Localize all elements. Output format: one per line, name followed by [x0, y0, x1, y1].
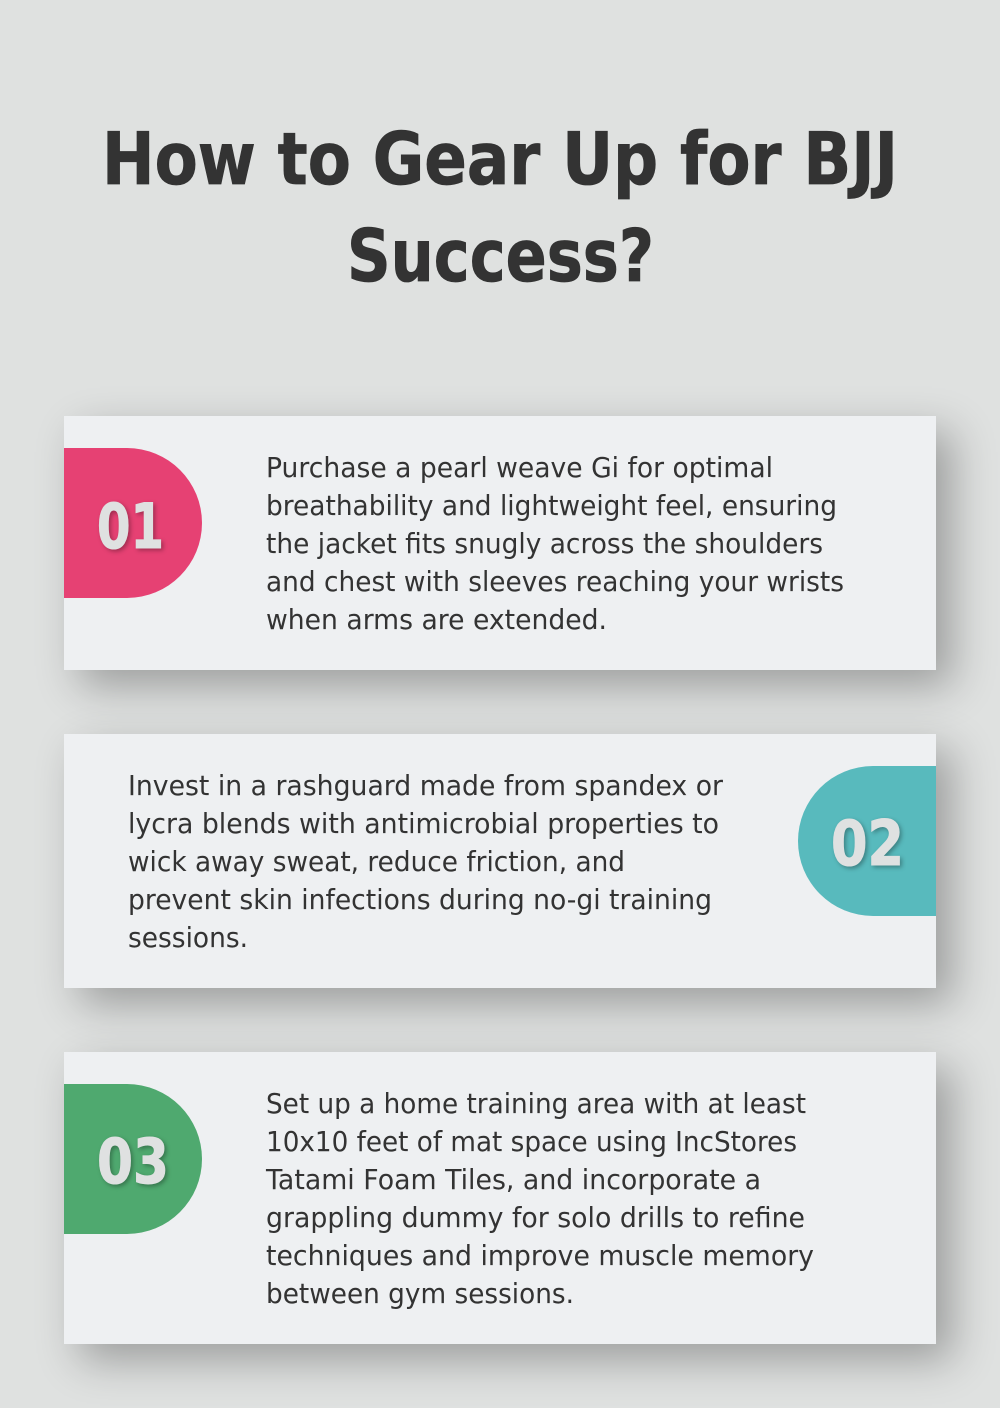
badge: 02: [798, 766, 936, 916]
title: Success?: [347, 214, 654, 298]
text: step 03 description: techniques and improve muscle memory: [266, 1240, 814, 1272]
panel: step 02: [64, 734, 936, 988]
badge: 01: [64, 448, 202, 598]
text: step 01 description: [266, 452, 844, 636]
title: How to Gear Up for BJJ: [102, 117, 898, 201]
text: step 02 description: prevent skin infections during no-gi training: [128, 884, 712, 916]
text: step 02 description: sessions.: [128, 922, 248, 954]
text: step 01 description: breathability and lightweight feel, ensuring: [266, 490, 837, 522]
text: step 01 description: and chest with sleeves reaching your wrists: [266, 566, 844, 598]
panel: step 01: [64, 416, 936, 670]
badge: 02: 02: [831, 807, 904, 880]
text: step 01 description: Purchase a pearl weave Gi for optimal: [266, 452, 773, 484]
text: step 02 description: Invest in a rashguard made from spandex or: [128, 770, 724, 802]
text: step 02 description: wick away sweat, reduce friction, and: [128, 846, 625, 878]
text: step 03 description: between gym sessions.: [266, 1278, 574, 1310]
badge: 03: 03: [97, 1125, 169, 1198]
text: step 02 description: lycra blends with antimicrobial properties to: [128, 808, 719, 840]
text: step 01 description: when arms are extended.: [266, 604, 607, 636]
badge: 03: [64, 1084, 202, 1234]
badge: 01: 01: [97, 490, 164, 563]
text: step 03 description: 10x10 feet of mat space using IncStores: [266, 1126, 797, 1158]
text: step 03 description: Set up a home training area with at least: [266, 1088, 806, 1120]
text: step 01 description: the jacket fits snugly across the shoulders: [266, 528, 823, 560]
text: step 03 description: grappling dummy for solo drills to refine: [266, 1202, 805, 1234]
text: step 03 description: Tatami Foam Tiles, and incorporate a: [265, 1164, 761, 1196]
text: step 03 description: [265, 1088, 814, 1310]
title: [102, 117, 898, 298]
panel: step 03: [64, 1052, 936, 1344]
text: step 02 description: [128, 770, 724, 954]
